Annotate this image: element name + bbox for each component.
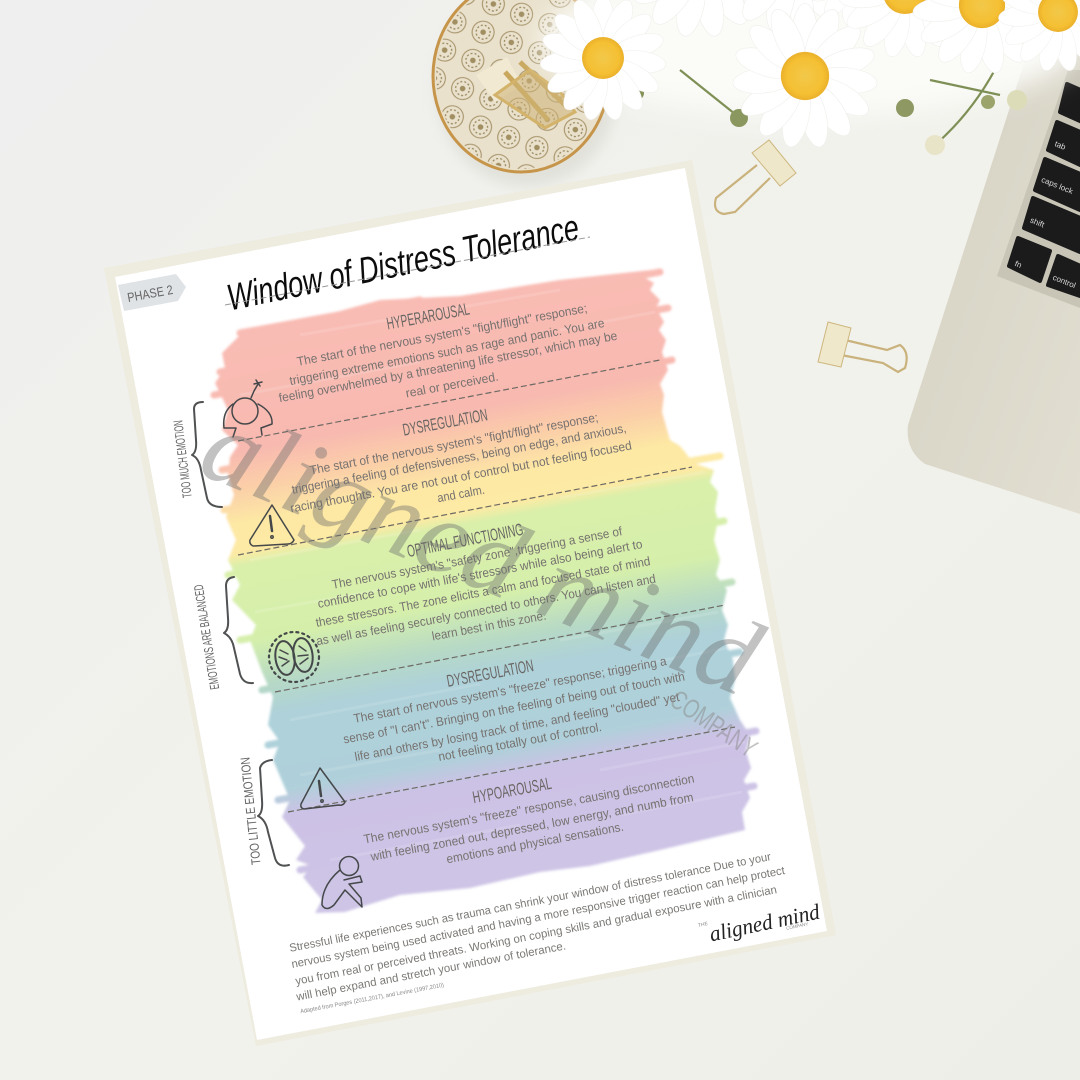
heading: dysregulation: DYSREGULATION	[401, 405, 489, 440]
body: hyperarousal: The start of the nervous system's "fight/flight" response;	[296, 301, 588, 369]
body: optimal functioning: these stressors. The zone elicits a calm and focused state of mind	[315, 554, 651, 630]
flower haze	[540, 0, 1080, 115]
binder clip upper	[715, 140, 796, 214]
label: emotions are balanced: EMOTIONS ARE BALANCED	[191, 584, 222, 691]
stems and buds	[630, 60, 1027, 155]
laptop	[908, 40, 1080, 514]
key labels: shift	[1029, 216, 1046, 230]
body: hypoarousal: The nervous system's "freeze" response, causing disconnection	[363, 771, 696, 846]
heading: optimal functioning: OPTIMAL FUNCTIONING	[405, 520, 525, 561]
label: too little emotion: TOO LITTLE EMOTION	[237, 757, 264, 866]
section: hypoarousal	[363, 771, 696, 866]
icon: brain with rays	[269, 632, 319, 682]
heading: dysregulation: DYSREGULATION	[445, 656, 535, 691]
watermark: aligned mind	[186, 384, 778, 719]
heading: hyperarousal: HYPERAROUSAL	[385, 299, 471, 333]
body: dysregulation: and calm.	[436, 483, 486, 505]
body: dysregulation: not feeling totally out of control.	[437, 720, 603, 764]
title	[223, 207, 590, 318]
icon: sitting person	[322, 856, 362, 908]
key labels: caps lock	[1040, 175, 1075, 196]
citation: Adapted from Porges (2011,2017), and Levine (1997,2010)	[300, 983, 445, 1015]
brace: emotions are balanced	[191, 577, 253, 691]
watermark: COMPANY	[665, 684, 763, 764]
body: optimal functioning: learn best in this zone.	[431, 609, 547, 643]
key labels: fn	[1013, 259, 1023, 270]
phase tag: PHASE 2	[126, 282, 174, 305]
footer paragraph: Stressful life experiences such as trauma can shrink your window of distress tolerance Due to your	[288, 851, 772, 955]
key labels: tab	[1053, 139, 1068, 152]
label: too much emotion: TOO MUCH EMOTION	[170, 419, 195, 499]
key labels: control	[1051, 273, 1077, 290]
section: optimal functioning	[315, 520, 657, 648]
icon: warning triangle lower	[301, 768, 345, 809]
body: dysregulation: The start of nervous system's "freeze" response; triggering a	[352, 654, 668, 726]
section: dysregulation lower	[342, 654, 686, 764]
section: hyperarousal	[278, 299, 618, 405]
body: hyperarousal: real or perceived.	[405, 370, 499, 400]
icon: warning triangle upper	[250, 505, 294, 546]
body: hypoarousal: emotions and physical sensations.	[445, 820, 625, 866]
logo: COMPANY	[786, 921, 809, 931]
body: dysregulation: The start of the nervous system's "fight/flight" response;	[309, 410, 599, 478]
body: optimal functioning	[315, 524, 657, 648]
footer paragraph	[288, 851, 787, 1004]
body: hyperarousal: triggering extreme emotions such as rage and panic. You are	[288, 316, 606, 388]
logo: THE	[697, 921, 709, 929]
footer paragraph: will help expand and stretch your window of tolerance.	[295, 940, 567, 1004]
daisies	[539, 0, 1080, 149]
body: hyperarousal: feeling overwhelmed by a threatening life stressor, which may be	[278, 329, 618, 405]
body: optimal functioning: The nervous system's "safety zone",triggering a sense of	[331, 524, 624, 592]
body: optimal functioning: confidence to cope with life's stressors while also being alert to	[316, 537, 644, 611]
brace: too little emotion	[237, 757, 289, 866]
worksheet page	[104, 160, 836, 1046]
key labels	[1013, 139, 1077, 290]
body: dysregulation: life and others by losing track of time, and feeling "clouded" yet	[353, 690, 681, 764]
body: dysregulation: sense of "I can't". Bringing on the feeling of being out of touch with	[342, 669, 686, 747]
brace: too much emotion	[170, 402, 222, 507]
dashed dividers	[238, 360, 735, 812]
icon: person with bomb head	[224, 380, 272, 437]
logo: aligned mind	[707, 898, 823, 946]
title: Window of Distress Tolerance	[223, 207, 582, 318]
body: optimal functioning: as well as feeling securely connected to others. You can listen and	[315, 572, 657, 648]
footer paragraph: you from real or perceived threats. Working on coping skills and gradual exposure with a clinician	[294, 884, 778, 988]
bowl with gold clip	[433, 0, 617, 186]
body: dysregulation: racing thoughts. You are not out of control but not feeling focused	[289, 438, 633, 516]
body: dysregulation: triggering a feeling of defensiveness, being on edge, and anxious,	[291, 421, 627, 497]
section: dysregulation upper	[289, 405, 633, 516]
body: hypoarousal: with feeling zoned out, depressed, low energy, and numb from	[369, 790, 695, 864]
phase tag	[118, 274, 186, 311]
binder clip lower	[818, 322, 907, 372]
rainbow brush background	[214, 270, 756, 913]
footer paragraph: nervous system being used activated and having a more responsive trigger reaction can help protect	[291, 865, 787, 971]
heading: hypoarousal: HYPOAROUSAL	[471, 774, 553, 807]
